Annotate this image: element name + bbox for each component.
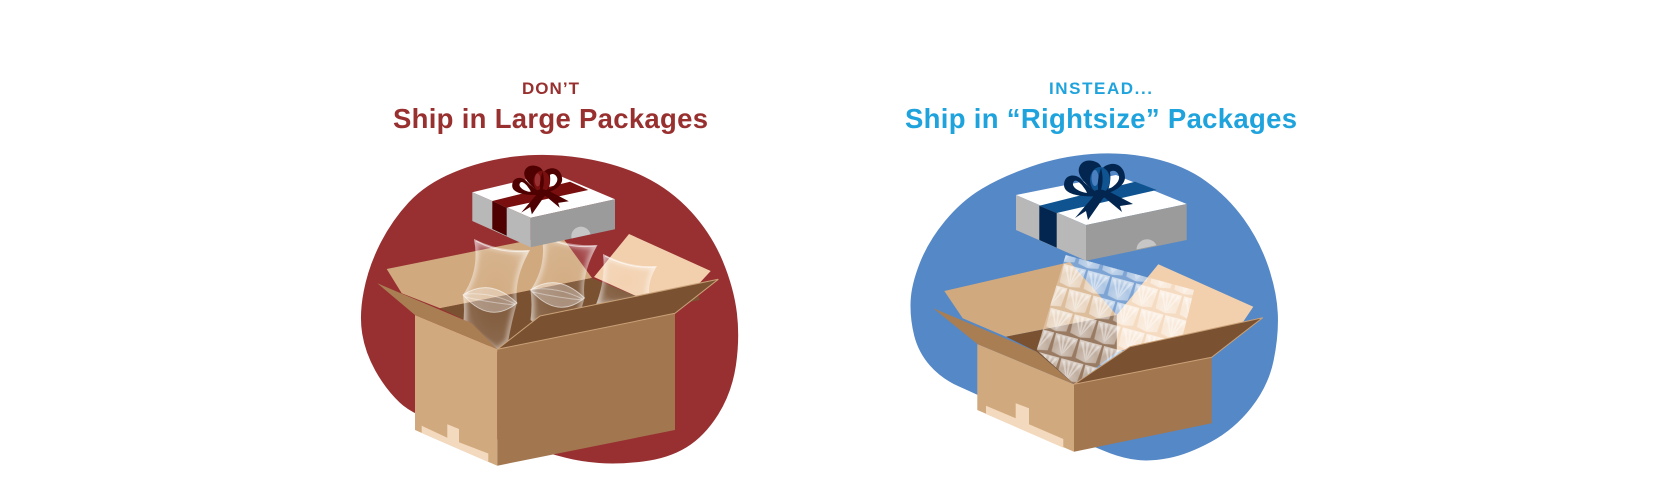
box left face [415, 315, 497, 466]
packing tape [986, 403, 1063, 448]
front right flap [497, 279, 718, 349]
box right face [1074, 357, 1212, 452]
gift box [1016, 160, 1187, 261]
air pillow middle [530, 234, 598, 347]
gift box [472, 165, 615, 247]
blue blob background [910, 153, 1278, 460]
red blob background [361, 155, 738, 464]
box interior [440, 278, 700, 349]
heading: Ship in Rightsize Packages: Ship in “Rightsize” Packages [905, 103, 1297, 134]
eyebrow: DON'T: DON’T [522, 79, 580, 98]
front right flap [1074, 318, 1263, 384]
air pillow left [463, 239, 530, 352]
bubble wrap sheet [1037, 255, 1194, 384]
heading: Ship in Large Packages: Ship in Large Packages [393, 103, 708, 134]
front left flap [933, 308, 1074, 384]
air pillow right [595, 254, 657, 307]
front left flap [377, 283, 497, 349]
box interior [1006, 315, 1117, 384]
panel: large package illustration [361, 155, 738, 466]
eyebrow: INSTEAD...: INSTEAD... [1049, 79, 1152, 98]
box back flaps [387, 234, 711, 308]
box back flaps [944, 262, 1253, 352]
gift bow [512, 165, 569, 214]
gift bow [1064, 160, 1133, 220]
box left face [977, 344, 1074, 452]
panel: rightsize package illustration [910, 153, 1278, 460]
box right face [497, 313, 675, 466]
packing tape [422, 424, 488, 462]
